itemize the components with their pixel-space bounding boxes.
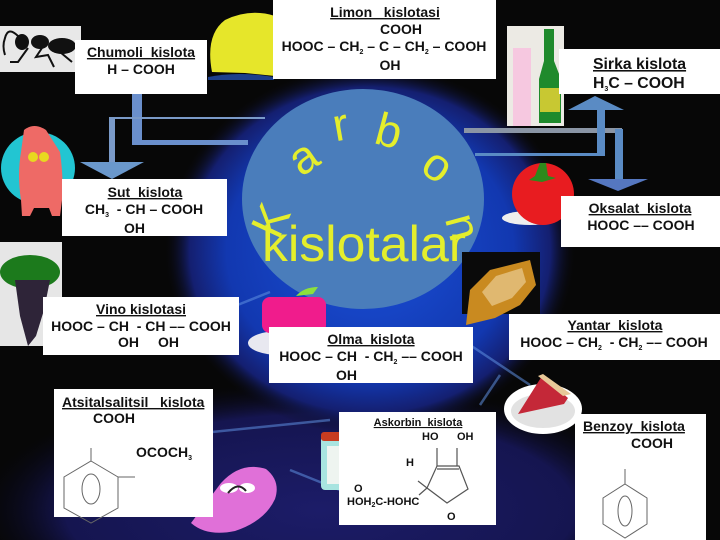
panel: Sirka kislota xyxy=(559,49,720,94)
icon: amber xyxy=(462,252,540,325)
icon: grapes xyxy=(0,242,62,346)
panel: Olma kislota: Olma kislota xyxy=(327,331,415,347)
curved title: Karbon: b xyxy=(370,102,408,159)
panel: Olma kislota: 2 xyxy=(394,359,398,366)
panel: Yantar kislota: 2 xyxy=(598,345,602,352)
panel: Yantar kislota: HOOC – CH xyxy=(520,334,598,350)
panel: Atsitalsalitsil kislota: COOH xyxy=(93,410,135,426)
panel: Limon kislotasi: Limon kislotasi xyxy=(330,4,440,20)
panel: Yantar kislota: –– COOH xyxy=(642,334,708,350)
panel: Sirka kislota: C – COOH xyxy=(608,75,685,92)
panel: Olma kislota xyxy=(269,327,473,383)
panel: Olma kislota: OH xyxy=(336,367,357,383)
panel: Sirka kislota: 3 xyxy=(604,86,608,93)
panel: Limon kislotasi: COOH xyxy=(380,21,422,37)
panel: Yantar kislota: 2 xyxy=(638,345,642,352)
panel: Limon kislotasi: – C – CH xyxy=(363,38,425,54)
icon: vitamin jar xyxy=(321,432,357,490)
panel: Sut kislota: 3 xyxy=(105,212,109,219)
panel: Sut kislota: - CH – COOH xyxy=(109,201,203,217)
panel: Vino kislotasi xyxy=(43,297,239,355)
panel: Olma kislota: –– COOH xyxy=(397,348,463,364)
panel: Oksalat kislota xyxy=(561,196,720,247)
panel: Askorbin kislota: HO xyxy=(422,431,439,443)
panel: Limon kislotasi: 2 xyxy=(359,49,363,56)
panel: Vino kislotasi: HOOC – CH - CH –– COOH xyxy=(51,318,231,334)
panel: Benzoy kislota xyxy=(575,414,706,540)
panel: Oksalat kislota: Oksalat kislota xyxy=(589,200,692,216)
panel: Yantar kislota: Yantar kislota xyxy=(568,317,663,333)
chemical structure: ascorbic ring xyxy=(418,448,468,503)
curved title: Karbon: K xyxy=(240,195,301,245)
panel: Limon kislotasi: OH xyxy=(380,57,400,73)
curved title: Karbon: a xyxy=(277,128,329,186)
panel: Sut kislota: Sut kislota xyxy=(108,184,183,200)
panel: Askorbin kislota: 2 xyxy=(371,502,375,509)
icon: lemon xyxy=(208,13,275,80)
curved title: Karbon: r xyxy=(328,97,352,151)
panel: Atsitalsalitsil kislota xyxy=(54,389,213,523)
panel: Olma kislota: HOOC – CH - CH xyxy=(279,348,394,364)
panel: Askorbin kislota: O xyxy=(447,511,456,523)
panel: Benzoy kislota: COOH xyxy=(631,435,673,451)
chemical structure: benzene ring xyxy=(603,469,647,538)
panel: Limon kislotasi: – COOH xyxy=(429,38,486,54)
panel: Chumoli kislota xyxy=(75,40,207,94)
panel: Askorbin kislota: HOH xyxy=(347,496,371,508)
connector arrows: right xyxy=(464,96,648,191)
panel: Oksalat kislota: HOOC –– COOH xyxy=(587,217,695,233)
icon: ant xyxy=(0,26,81,72)
label: kislotalar: kislotalar xyxy=(262,216,466,272)
panel: Askorbin kislota: O xyxy=(354,483,363,495)
icon: pie xyxy=(504,374,582,434)
panel: Sut kislota xyxy=(62,179,227,236)
panel: Sut kislota: CH xyxy=(85,201,105,217)
central circle xyxy=(240,89,492,309)
panel: Sirka kislota: Sirka kislota xyxy=(593,56,686,73)
panel: Vino kislotasi: OH xyxy=(158,334,179,350)
panel: Chumoli kislota: H – COOH xyxy=(107,61,175,77)
panel: Atsitalsalitsil kislota: Atsitalsalitsil kislota xyxy=(62,394,205,410)
panel: Askorbin kislota: Askorbin kislota xyxy=(374,417,463,429)
panel: Vino kislotasi: OH xyxy=(118,334,139,350)
curved title: Karbon xyxy=(240,97,492,246)
panel: Chumoli kislota: Chumoli kislota xyxy=(87,44,195,60)
panel: Vino kislotasi: Vino kislotasi xyxy=(96,301,186,317)
panel: Yantar kislota: - CH xyxy=(602,334,638,350)
panel: Askorbin kislota: OH xyxy=(457,431,474,443)
curved title: Karbon: o xyxy=(413,136,464,194)
chemical structure: aspirin ring xyxy=(64,448,135,523)
panel: Limon kislotasi: HOOC – CH xyxy=(282,38,359,54)
icon: milk character xyxy=(1,126,75,216)
icon: bottle xyxy=(507,26,564,126)
panel: Sirka kislota: H xyxy=(593,75,604,92)
panel: Atsitalsalitsil kislota: OCOCH xyxy=(136,444,188,460)
panel: Askorbin kislota xyxy=(339,412,496,525)
curved title: Karbon: n xyxy=(435,208,492,246)
connector arrows: left xyxy=(80,94,265,179)
panel: Askorbin kislota: H xyxy=(406,457,414,469)
icon: apple xyxy=(248,287,326,355)
icon: pill character xyxy=(191,467,277,533)
panel: Benzoy kislota: Benzoy kislota xyxy=(583,418,685,434)
panel: Yantar kislota xyxy=(509,314,720,360)
icon: tomato xyxy=(502,163,574,225)
panel: Limon kislotasi: 2 xyxy=(425,49,429,56)
panel: Sut kislota: OH xyxy=(124,220,145,236)
panel: Limon kislotasi xyxy=(273,0,496,79)
panel: Askorbin kislota: C-HOHC xyxy=(375,496,419,508)
panel: Atsitalsalitsil kislota: 3 xyxy=(188,455,192,462)
